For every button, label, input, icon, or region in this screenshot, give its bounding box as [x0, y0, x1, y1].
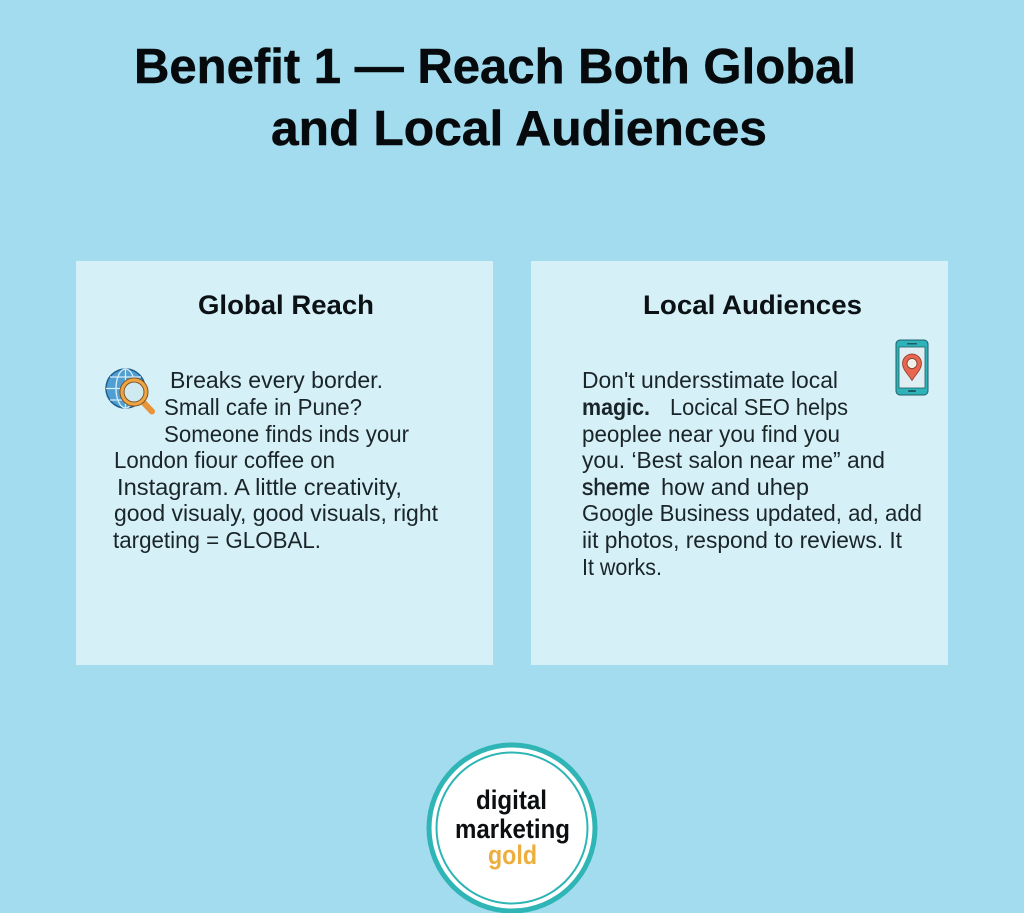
title [134, 40, 856, 156]
text block: local audiences body [582, 367, 922, 580]
heading: local audiences: Local Audiences [643, 290, 862, 320]
icon: globe with magnifier [106, 369, 152, 412]
text block: local audiences body: It works. [582, 554, 662, 580]
text block: global reach body: Small cafe in Pune? [164, 394, 362, 420]
text block: global reach body: good visualy, good visuals, right [114, 500, 439, 526]
text block: local audiences body: you. ‘Best salon near me” and [582, 447, 885, 473]
text block: local audiences body: Google Business updated, ad, add [582, 500, 922, 526]
text block: local audiences body: magic. [582, 394, 650, 420]
text block: local audiences body: how and uhep [661, 474, 809, 500]
title: Benefit 1 — Reach Both Global [134, 40, 856, 94]
heading: global reach: Global Reach [198, 290, 374, 320]
text block: global reach body: targeting = GLOBAL. [113, 527, 321, 553]
logo text: digital [476, 785, 547, 815]
panel: global reach [76, 261, 493, 665]
text block: local audiences body: Locical SEO helps [670, 394, 848, 420]
icon: phone with map pin [896, 340, 928, 395]
text block: global reach body [113, 367, 439, 553]
text block: global reach body: Someone finds inds your [164, 421, 409, 447]
title: and Local Audiences [271, 102, 767, 156]
text block: global reach body: Instagram. A little creativity, [117, 474, 402, 500]
text block: local audiences body: Don't undersstimate local [582, 367, 838, 393]
text block: local audiences body: iit photos, respond to reviews. It [582, 527, 903, 553]
logo text: marketing [455, 814, 570, 844]
text block: local audiences body: sheme [582, 474, 650, 500]
panel: local audiences [531, 261, 948, 665]
logo text [455, 785, 570, 870]
text block: global reach body: London fiour coffee on [114, 447, 335, 473]
text block: local audiences body: peoplee near you find you [582, 421, 840, 447]
logo text: gold [488, 840, 537, 870]
text block: global reach body: Breaks every border. [170, 367, 383, 393]
logo badge [426, 742, 598, 913]
